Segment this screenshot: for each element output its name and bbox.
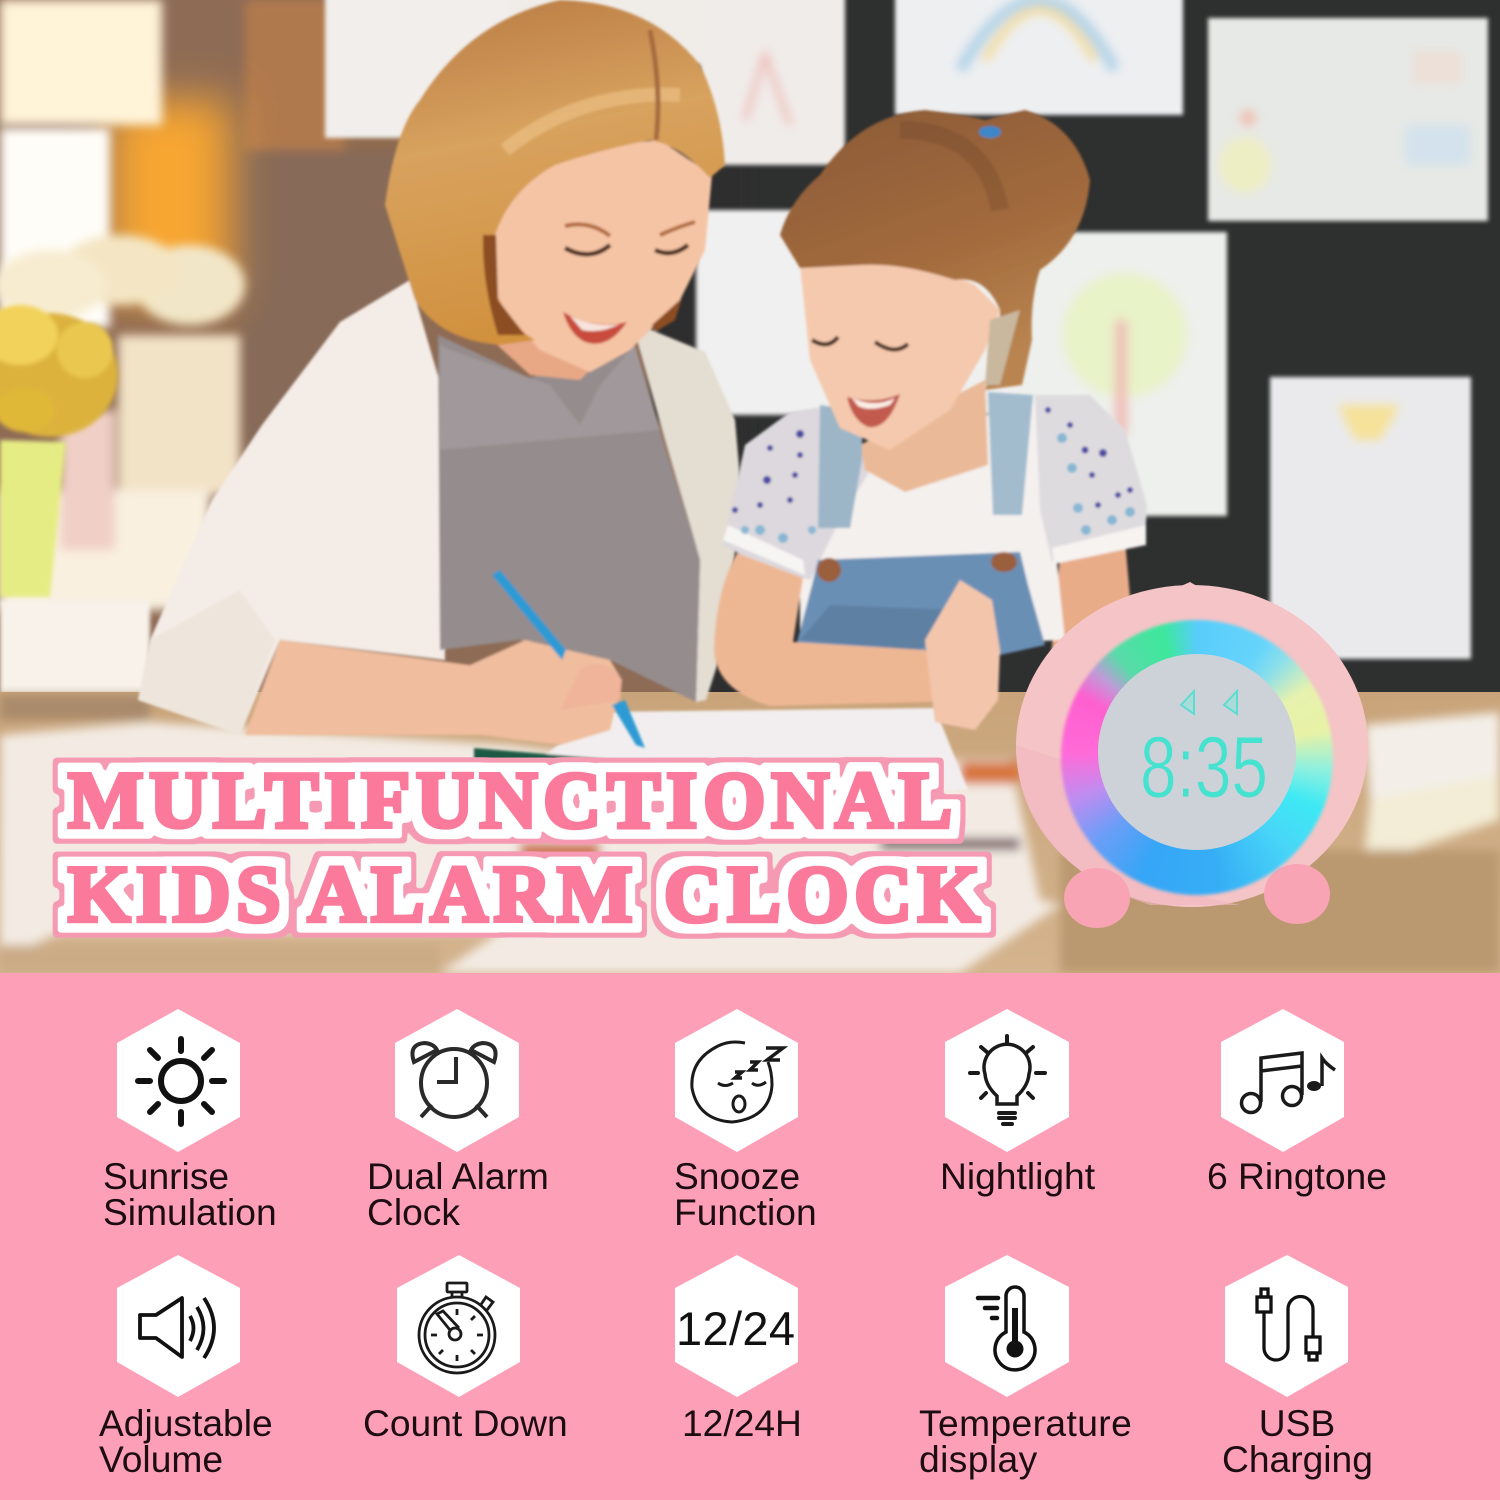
girl shirt print: [732, 407, 1133, 513]
girl face: [800, 250, 1000, 450]
girl right arm: [1050, 540, 1132, 670]
label: Dual Alarm Clock: Clock: [367, 1190, 460, 1232]
label: 12/24H: 12/24H: [682, 1402, 802, 1444]
icon: temperature thermometer: [945, 1255, 1069, 1397]
girl hands: [925, 580, 1000, 730]
label: Nightlight: Nightlight: [940, 1155, 1095, 1197]
title: Multifunctional Kids Alarm Clock: [52, 756, 996, 939]
icon: dual alarm clock: [395, 1009, 519, 1152]
label: USB Charging: Charging: [1222, 1438, 1373, 1480]
girl hair: [780, 110, 1090, 390]
girl left arm: [714, 553, 965, 706]
label: Adjustable Volume: Adjustable: [99, 1402, 273, 1444]
neck: [470, 320, 630, 380]
label: 6 Ringtone: 6 Ringtone: [1207, 1155, 1387, 1197]
label: Snooze Function: Snooze: [674, 1155, 800, 1197]
icon: adjustable volume speaker: [117, 1255, 240, 1397]
icon: USB charging cable: [1225, 1255, 1348, 1397]
label: Dual Alarm Clock: Dual Alarm: [367, 1155, 549, 1197]
label: Snooze Function: Function: [674, 1190, 817, 1232]
icon: 12/24 hour format: [675, 1255, 798, 1397]
features panel: [0, 973, 1500, 1500]
pencil: [492, 570, 566, 660]
clock body: [1016, 582, 1368, 928]
label: Sunrise Simulation: Simulation: [103, 1190, 277, 1232]
woman blouse: [438, 335, 700, 702]
clock display: [1098, 654, 1296, 850]
background wall, window and board: [0, 0, 1500, 973]
photo: mother and daughter drawing at a table: [0, 0, 1500, 973]
girl: [714, 110, 1147, 730]
title: Multifunctional Kids Alarm Clock: KIDS ALARM CLOCK: [68, 851, 980, 939]
label: USB Charging: USB: [1259, 1402, 1335, 1444]
alarm bell icons: [1181, 691, 1237, 714]
papers on the board: [325, 0, 1488, 659]
label: USB Charging: [1222, 1402, 1373, 1480]
label: Snooze Function: [674, 1155, 817, 1232]
product: peach alarm clock: [1016, 582, 1368, 928]
table and scattered papers: [0, 692, 1500, 973]
denim straps: [818, 405, 862, 528]
plants and vases: [0, 235, 245, 610]
label: Adjustable Volume: [99, 1402, 273, 1480]
icon: 12/24 hour format: 12/24: [676, 1302, 795, 1355]
label: Sunrise Simulation: Sunrise: [103, 1155, 229, 1197]
woman arm and hand: [245, 640, 622, 745]
title: Multifunctional Kids Alarm Clock: MULTIFUNCTIONAL: [68, 757, 952, 845]
icon: snooze function: [675, 1009, 798, 1152]
woman cardigan: [138, 280, 445, 735]
girl blouse: [800, 400, 1065, 650]
label: Temperature display: display: [919, 1438, 1038, 1480]
label: Temperature display: [919, 1402, 1132, 1480]
label: Temperature display: Temperature: [919, 1402, 1132, 1444]
digital time: 8:35: [1140, 719, 1268, 816]
woman: [138, 0, 742, 748]
denim bib: [795, 552, 1045, 655]
woman face: [480, 140, 712, 372]
icon: countdown stopwatch: [397, 1255, 520, 1397]
label: Adjustable Volume: Volume: [99, 1438, 223, 1480]
label: Count Down: Count Down: [363, 1402, 568, 1444]
icon: nightlight bulb: [945, 1009, 1069, 1152]
buttons: [817, 558, 841, 582]
woman eyes and mouth: [565, 245, 610, 254]
neck and chest: [860, 380, 988, 492]
label: Dual Alarm Clock: [367, 1155, 549, 1232]
girl eyes and mouth: [812, 337, 908, 350]
label: Sunrise Simulation: [103, 1155, 277, 1232]
icon: sunrise simulation: [117, 1009, 240, 1152]
rainbow light ring: [1061, 620, 1333, 895]
icon: music notes: [1221, 1009, 1344, 1152]
woman hair: [385, 0, 725, 345]
